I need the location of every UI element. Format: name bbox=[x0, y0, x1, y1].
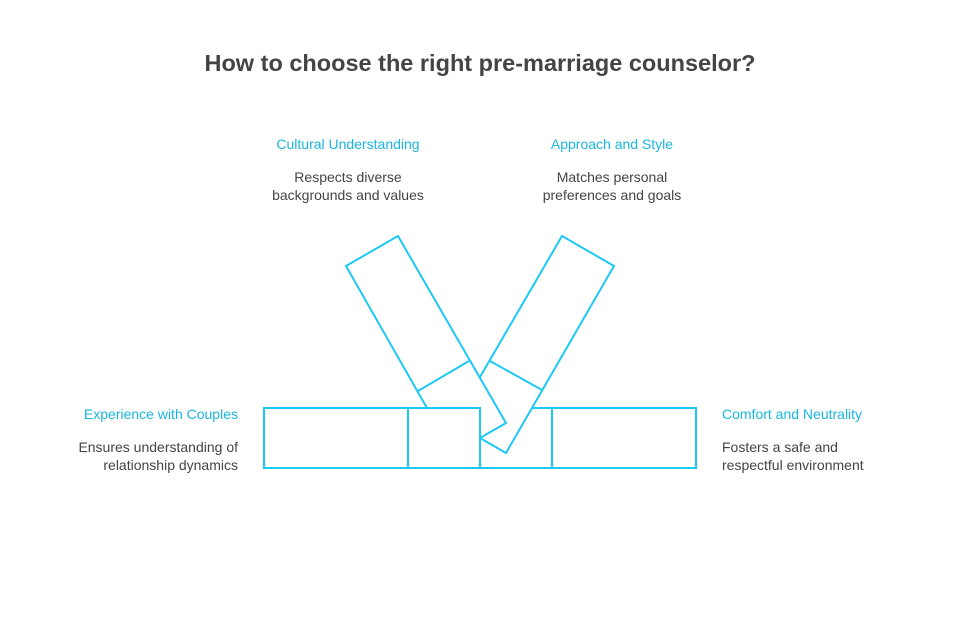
text: cultural: backgrounds and values bbox=[272, 187, 424, 203]
text: comfort bbox=[722, 439, 864, 473]
left tilted bar bbox=[346, 236, 506, 438]
text: approach: Matches personal bbox=[557, 169, 667, 185]
text: approach: preferences and goals bbox=[543, 187, 681, 203]
text: comfort: Fosters a safe and bbox=[722, 439, 838, 455]
text: experience: relationship dynamics bbox=[103, 457, 238, 473]
heading: Experience with Couples: Experience with Couples bbox=[84, 406, 238, 422]
text: experience bbox=[78, 439, 238, 473]
left bottom bar bbox=[264, 408, 480, 468]
text: comfort: respectful environment bbox=[722, 457, 864, 473]
heading: Comfort and Neutrality: Comfort and Neutrality bbox=[722, 406, 862, 422]
text: cultural: Respects diverse bbox=[294, 169, 402, 185]
title: How to choose the right pre-marriage counselor? bbox=[204, 50, 756, 76]
heading: Approach and Style: Approach and Style bbox=[551, 136, 673, 152]
text: experience: Ensures understanding of bbox=[78, 439, 238, 455]
right bottom bar bbox=[480, 408, 696, 468]
right tilted bar bbox=[480, 236, 614, 453]
heading: Cultural Understanding: Cultural Understanding bbox=[276, 136, 420, 152]
text: cultural bbox=[272, 169, 424, 203]
text: approach bbox=[543, 169, 681, 203]
